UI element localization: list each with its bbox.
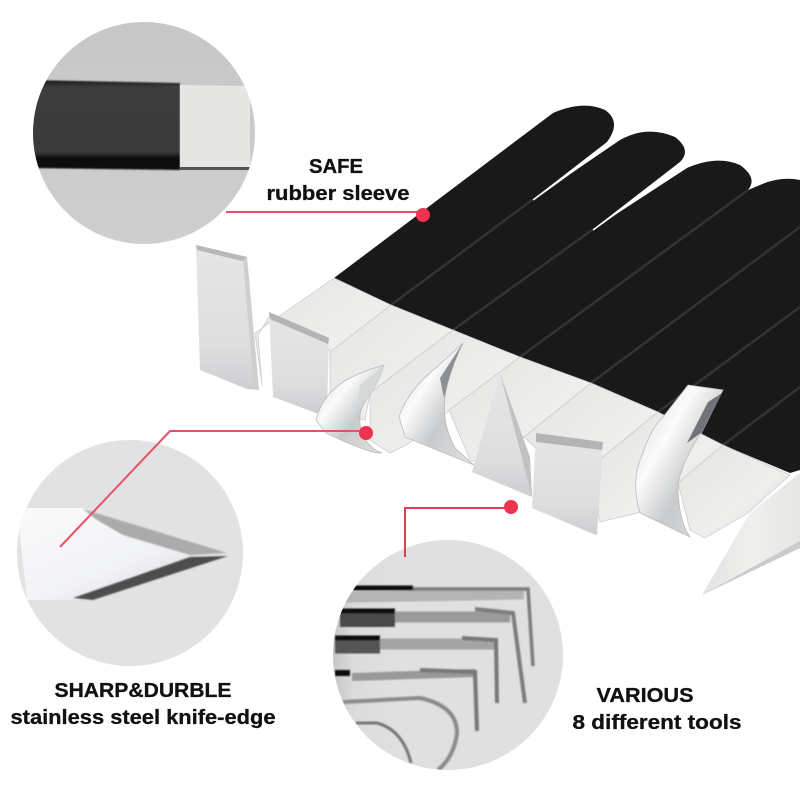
blade: flat chisel 3 — [532, 433, 603, 535]
callout line: sharp — [60, 431, 366, 547]
label: various — [572, 685, 742, 734]
label: sharp and durable: SHARP&DURBLE — [54, 680, 231, 702]
blade: triangle — [472, 373, 532, 497]
product photo: knife set — [196, 106, 800, 595]
tool shapes — [335, 588, 533, 770]
black rubber handles — [334, 106, 800, 473]
callout dot: sharp — [359, 426, 373, 440]
zoom circle: various tools — [330, 540, 570, 772]
steel shanks — [255, 278, 790, 538]
rubber sleeve band — [30, 80, 180, 170]
callout line: various — [405, 508, 511, 557]
callout dot: various — [504, 500, 518, 514]
label: various: 8 different tools — [572, 712, 742, 734]
zoom circle: knife edge — [15, 438, 245, 668]
callout dot: safe — [416, 208, 430, 222]
lower dark bevel — [73, 556, 228, 600]
blade: flat chisel 2 — [269, 312, 329, 413]
blade: hook 2 — [399, 343, 474, 465]
upper bevel — [83, 509, 227, 555]
blade: flat chisel 1 — [196, 245, 259, 390]
label: safe: SAFE — [309, 156, 363, 178]
label: safe: rubber sleeve — [266, 183, 410, 205]
label: safe — [266, 156, 410, 205]
blade: pointed knife — [702, 473, 800, 595]
label: various: VARIOUS — [596, 685, 694, 707]
callout line: safe — [226, 211, 423, 213]
label: sharp and durable — [10, 680, 276, 729]
white steel section — [180, 85, 250, 168]
label: sharp and durable: stainless steel knife-edge — [10, 707, 276, 729]
blade: hook 1 — [316, 365, 384, 453]
zoom circle: rubber sleeve — [30, 20, 260, 246]
knife body — [20, 508, 201, 600]
blade: ring hook — [636, 385, 723, 537]
